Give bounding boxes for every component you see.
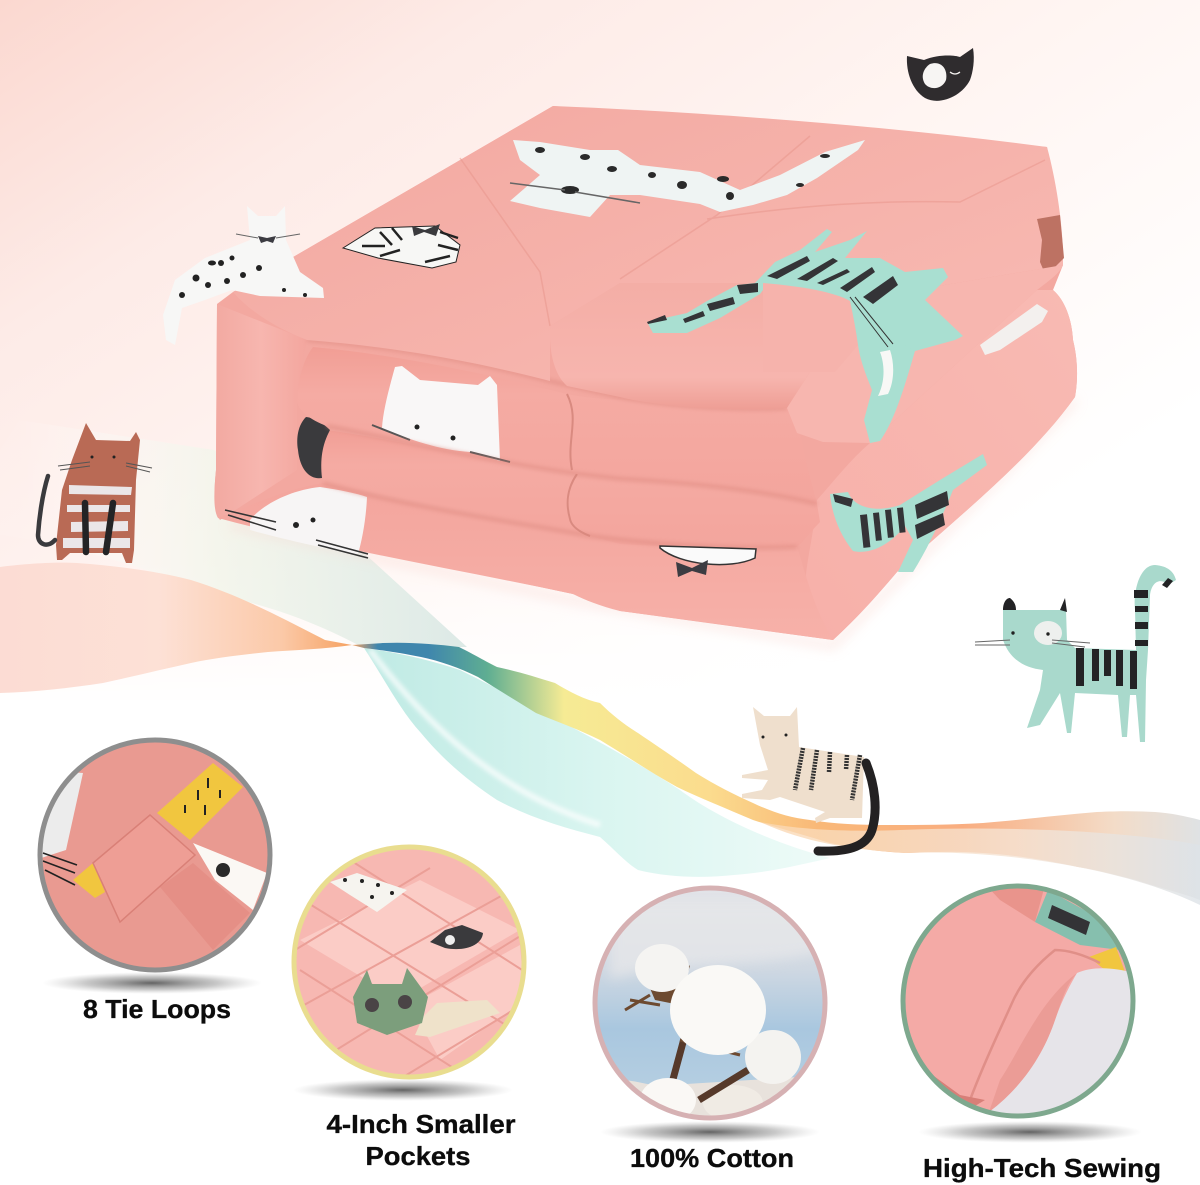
icon: beige cat bbox=[742, 707, 875, 851]
shadow bbox=[42, 972, 262, 994]
collar and bow tie bbox=[660, 546, 756, 577]
icon: black cat head bbox=[907, 48, 974, 101]
layer 2 roll bbox=[297, 347, 817, 504]
shadow bbox=[600, 1121, 820, 1143]
quilt: folded pink blanket bbox=[214, 106, 1077, 646]
fold shadows bbox=[307, 340, 817, 548]
icon: red striped cat bbox=[38, 423, 152, 563]
panel: 4-inch smaller pockets bbox=[290, 840, 530, 1085]
dalmatian cat on top bbox=[510, 140, 865, 217]
label: 4-Inch Smaller Pockets: Pockets bbox=[366, 1141, 470, 1171]
label: High-Tech Sewing: High-Tech Sewing bbox=[923, 1153, 1161, 1183]
label: 8 Tie Loops: 8 Tie Loops bbox=[83, 994, 231, 1024]
pink band left bbox=[0, 563, 352, 693]
label: 4-Inch Smaller Pockets bbox=[326, 1109, 516, 1171]
layer 3 roll bbox=[320, 429, 820, 548]
left side panel bbox=[215, 304, 307, 520]
panel: 8 tie loops bbox=[38, 738, 272, 972]
teal fan bbox=[364, 648, 830, 877]
white cat in fold bbox=[372, 366, 510, 462]
white streak bbox=[370, 650, 600, 825]
upper right side wall bbox=[787, 265, 1063, 443]
black fold cap bbox=[297, 417, 330, 478]
label: 100% Cotton: 100% Cotton bbox=[630, 1143, 794, 1173]
top fold right lip bbox=[550, 283, 850, 409]
soft shadow under quilt bbox=[230, 400, 1075, 646]
brown cat edge bbox=[1037, 215, 1064, 276]
panel: high-tech sewing bbox=[900, 884, 1136, 1118]
lip corner cover bbox=[763, 283, 858, 372]
rainbow wave ribbon bbox=[0, 420, 1200, 905]
label: 4-Inch Smaller Pockets: 4-Inch Smaller bbox=[326, 1109, 516, 1139]
layer 4 bottom strip bbox=[218, 483, 833, 640]
lower pale ribbon bbox=[760, 822, 1200, 905]
shadow bbox=[918, 1121, 1142, 1143]
icon: teal walking cat bbox=[975, 565, 1176, 742]
seams on top bbox=[460, 136, 1045, 326]
white cat bottom bbox=[225, 487, 368, 558]
main ribbon bbox=[352, 643, 1200, 900]
quilt base silhouette bbox=[214, 106, 1077, 640]
icon: spotted white cat bbox=[163, 206, 324, 345]
teal cat on top bbox=[647, 229, 963, 351]
teal cat head on side bbox=[858, 345, 915, 443]
loop photo bbox=[42, 742, 268, 968]
white spotted cat peeking lower right bbox=[980, 304, 1048, 355]
shadow bbox=[293, 1079, 513, 1101]
panel: 100% cotton bbox=[590, 885, 830, 1125]
top surface bbox=[233, 106, 1063, 381]
striped small cat on top bbox=[343, 224, 460, 268]
teal cat on lower side bbox=[830, 454, 987, 572]
lower right side bbox=[806, 290, 1077, 640]
pale green fan upper left bbox=[0, 420, 467, 648]
